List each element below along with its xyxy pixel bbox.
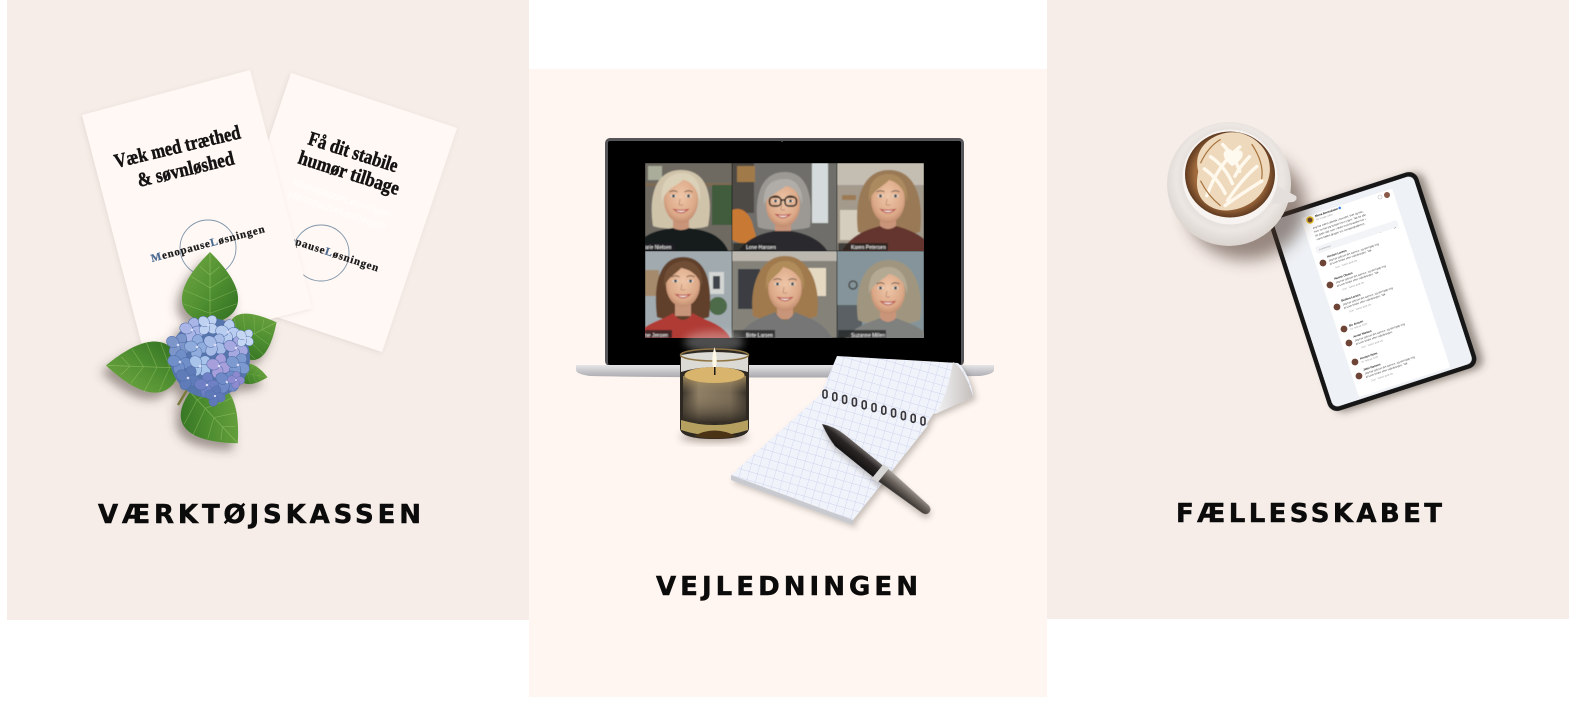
panel: Værktøjskassen [7,0,529,620]
comment rows: Jeg har oplevet det samme, og det hjalp mig [1342,286,1394,307]
icon: hydrangea flower with leaves [105,252,288,462]
card headline [295,128,402,200]
card headline: humør tilbage [295,147,402,200]
comment field: Kommentar [1319,245,1332,251]
icon: pen [815,418,935,520]
logo: circle and wordmark: MenopauseLøsningen [150,223,266,265]
comment rows: Bettina Larsen [1341,292,1361,303]
folded pages [820,356,973,425]
spiral binding [823,390,925,425]
comment rows: Svar · Synes godt om [1349,303,1371,313]
video tile: Marie Nielsen: arie Nielsen [645,245,672,251]
share icons [1371,225,1396,235]
card: Væk med træthed og søvnløshed [82,70,312,353]
faint white card text: MenopauseLøsningen [291,176,393,221]
card headline [112,122,243,192]
comment rows: Svar · Synes godt om [1371,372,1393,382]
post header: men nu har jeg fundet min ro igen. Tak for alle [1313,212,1367,234]
video tile: Suzanne Millen: Suzanne Millen [851,333,885,339]
video tile: Birte Larsen: Birte Larsen [746,333,773,339]
video tile: Lone Hansen: Lone Hansen [746,245,776,251]
comment rows: Jeg har oplevet det samme, og det hjalp mig [1364,355,1416,376]
heading: Værktøjskassen: VÆRKTØJSKASSEN [98,500,421,530]
video tile: Anne Jensen: ne Jensen [645,333,668,339]
comment rows: at sove bedre efter vejledningen. Tak. [1365,361,1409,379]
post header: Jeg har været atletisk i hovedet, træt og trist, [1312,209,1364,230]
panel: Fællesskabet [1047,0,1569,619]
comment rows: Annet Nielsen [1353,329,1372,339]
post header: for 3 dage siden [1316,213,1334,221]
laptop with video call [576,138,994,378]
comment rows: Svar · Synes godt om [1335,259,1357,269]
video tile: Suzanne Millen [837,251,924,338]
comment rows: at sove bedre efter vejledningen. Tak. [1336,270,1380,288]
post header: de gode råd, som I deler med hinanden her i [1315,217,1366,238]
faint white card text: MenopauseLøsningen [286,188,388,233]
comment rows: Kirsten Holm [1360,351,1378,361]
comment rows: Hanne Olesen [1334,271,1353,281]
video tile: Karen Petersen [837,163,924,251]
page stack [731,475,853,525]
comment rows: Jeg har oplevet det samme, og det hjalp mig [1328,242,1380,263]
video tile: Lone Hansen [732,163,837,251]
card headline: & søvnløshed [135,148,236,192]
card: Få dit stabile humør tilbage [216,73,457,352]
icon: coffee cup with latte art [1167,122,1306,260]
post header [1305,199,1369,243]
comment rows: at sove bedre efter vejledningen. [1355,330,1393,346]
video tile: Birte Larsen [732,251,837,338]
comment rows: 20. februar 2025 [1361,355,1379,364]
comment rows: Svar · Synes godt om [1361,339,1383,349]
panel: Vejledningen [529,69,1047,697]
card headline: Få dit stabile [305,128,401,177]
video tile: Marie Nielsen [645,163,732,251]
post header: vores fælles gruppe om overgangsalderen. [1316,221,1366,241]
heading: Fællesskabet: FÆLLESSKABET [1176,499,1442,529]
comment rows: 23. februar 2025 [1350,322,1368,331]
icon: tablet with community feed [1267,169,1479,414]
grid page [731,395,928,520]
video tile: Anne Jensen [645,251,732,338]
laptop base [576,365,994,378]
comment field [1315,220,1399,254]
icon: lit candle in glass [680,331,749,442]
comment rows: Kirsten Larsen [1327,248,1347,259]
video tile: Karen Petersen: Karen Petersen [851,245,886,251]
post header: Mona Bentsdatter [1314,206,1340,218]
heading: Vejledningen: VEJLEDNINGEN [656,572,918,602]
comment rows: at sove bedre efter vejledningen. Tak. [1343,292,1387,310]
card headline: Væk med træthed [112,122,243,173]
comment rows: Jeg har oplevet det samme, og det hjalp mig [1335,264,1387,285]
logo: circle and wordmark: MenopauseLøsningen [265,226,380,274]
comment rows [1318,238,1418,387]
comment rows: Svar · Synes godt om [1342,281,1364,291]
comment rows: at sove bedre efter vejledningen. Tak. [1329,248,1373,266]
search and profile icons [1378,192,1390,199]
icon: spiral notebook [731,356,973,525]
comment rows: Bo Jensen [1349,319,1364,328]
comment rows: Jeg har oplevet det samme, og det hjalp mig [1354,322,1406,343]
comment rows: Jette Hansen [1363,362,1381,372]
